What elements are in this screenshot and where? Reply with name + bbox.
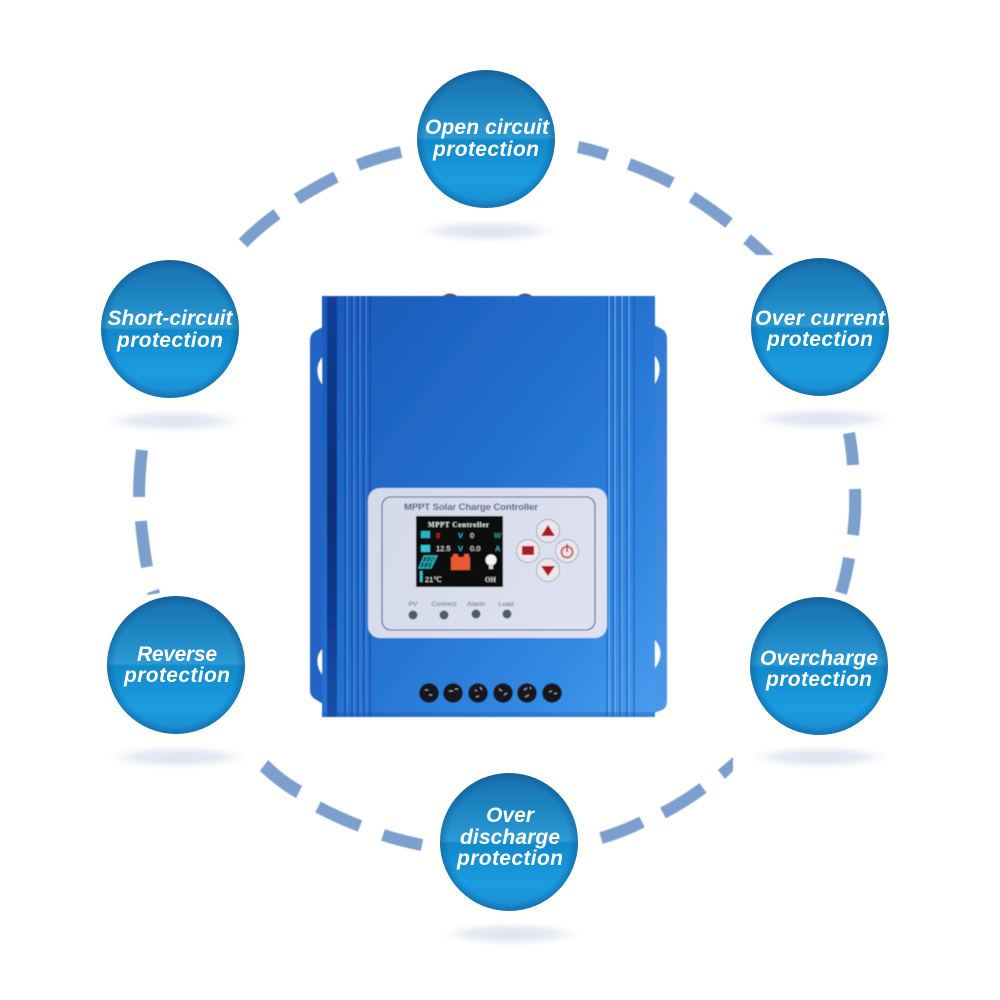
indicator labels: Load [498, 601, 514, 608]
circle: short-circuit protection: Short-circuit [108, 307, 234, 330]
circle: over discharge protection: protection [456, 847, 563, 870]
circle: overcharge protection [750, 597, 888, 735]
right mounting flange [654, 325, 667, 713]
solar panel icon [419, 556, 437, 568]
indicator labels: Connect [431, 601, 457, 608]
thermometer icon [420, 571, 422, 582]
battery icon [451, 554, 470, 570]
LCD screen: 0 [436, 531, 440, 540]
LCD screen: A [495, 544, 501, 553]
keypad [516, 520, 578, 582]
LCD screen: V [458, 544, 463, 553]
circle: over discharge protection [440, 773, 578, 911]
indicator labels: PV [408, 601, 418, 608]
LCD screen: W [494, 531, 502, 540]
left mounting flange [310, 327, 323, 704]
indicator labels: Alarm [467, 601, 485, 608]
circle: overcharge protection: protection [765, 668, 872, 691]
circle: over current protection: Over current [755, 307, 886, 330]
panel heading: MPPT Solar Charge Controller [404, 502, 538, 513]
dark left edge [327, 297, 337, 717]
LCD screen: 0 [470, 531, 474, 540]
front label panel [368, 488, 607, 638]
indicator labels [408, 601, 514, 608]
right fin grooves [607, 296, 634, 717]
circle: over discharge protection: Over [486, 804, 536, 827]
circle: over current protection: protection [766, 328, 873, 351]
ground shadows under circles [102, 220, 895, 945]
LCD screen: 0.0 [470, 544, 480, 553]
terminal screws [419, 683, 562, 703]
indicator LEDs [408, 610, 512, 620]
controller device [310, 294, 667, 717]
circle: short-circuit protection [101, 260, 239, 398]
mounting slots [318, 356, 323, 676]
circle: reverse protection: Reverse [137, 643, 217, 666]
LCD screen: OH [485, 576, 496, 584]
LCD screen: 21℃ [425, 575, 442, 584]
circle: reverse protection [107, 596, 245, 734]
circle: short-circuit protection: protection [116, 329, 223, 352]
top connectors [443, 294, 532, 296]
circle: over current protection [751, 258, 889, 396]
LCD screen: V [458, 531, 463, 540]
LCD screen: 12.5 [436, 544, 451, 553]
circle: open circuit protection [417, 70, 555, 208]
circle: open circuit protection: Open circuit [425, 116, 550, 139]
circle: reverse protection: protection [123, 664, 230, 687]
circle: open circuit protection: protection [432, 138, 539, 161]
bottom lip [322, 712, 655, 717]
dashed ring connecting the protection circles [139, 147, 855, 845]
device body [322, 296, 655, 717]
bulb icon [486, 554, 496, 569]
LCD screen [416, 516, 503, 587]
circle: overcharge protection: Overcharge [760, 647, 878, 670]
left fin grooves [345, 296, 370, 717]
circle: over discharge protection: discharge [460, 826, 560, 849]
LCD screen: MPPT Controller [428, 521, 489, 529]
